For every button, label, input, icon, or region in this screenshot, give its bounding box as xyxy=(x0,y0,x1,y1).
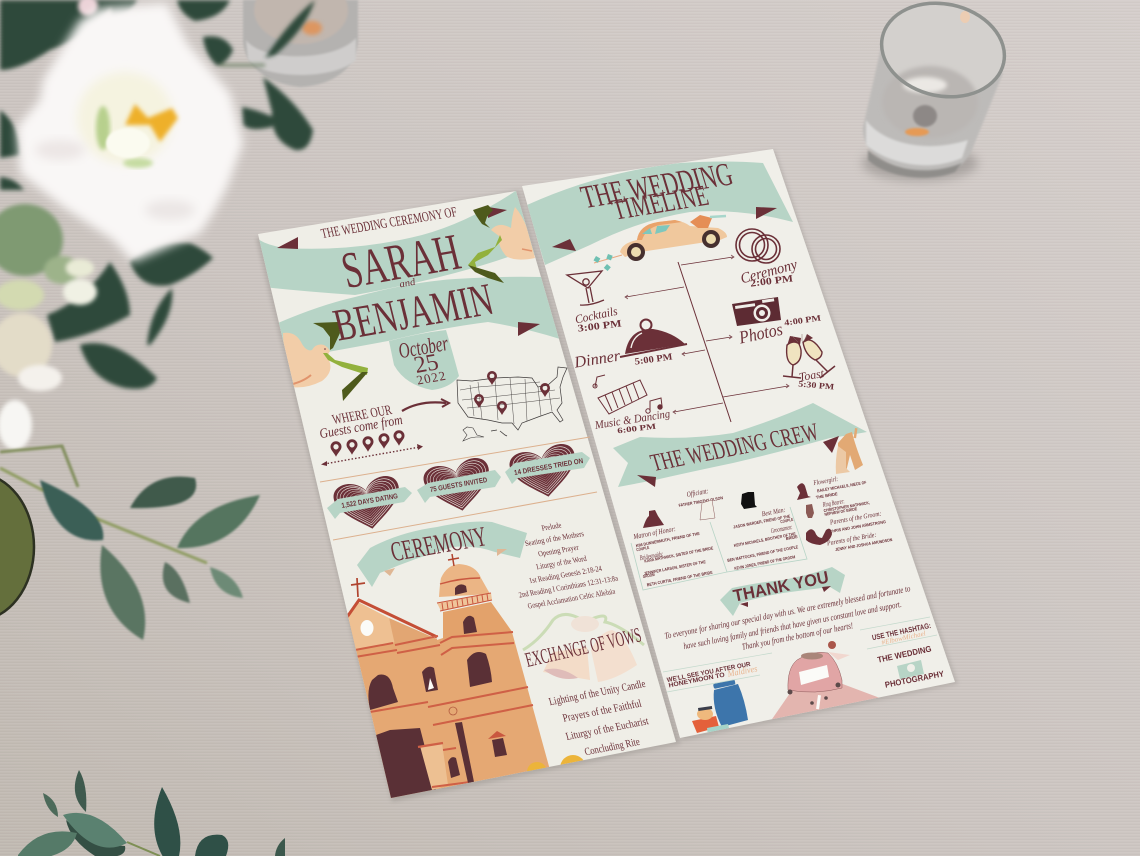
crew: officiant: Officiant: xyxy=(686,486,709,499)
crew: bride's side: KIM DUNNERMUTH, FRIEND OF THE xyxy=(635,531,700,548)
crew: bride's side: Matron of Honor: xyxy=(632,524,676,541)
timeline heading xyxy=(577,157,737,226)
crew borders xyxy=(631,507,807,590)
date shield xyxy=(389,330,459,390)
usa map with pins xyxy=(457,367,567,441)
crew: groom's side: Groomsmen: xyxy=(770,523,793,535)
toast time: 5:30 PM xyxy=(798,378,835,392)
ceremony time: 2:00 PM xyxy=(750,273,794,290)
date: 25 xyxy=(411,350,441,379)
crew heading: THE WEDDING CREW xyxy=(647,419,822,477)
ceremony ribbon and heading xyxy=(357,521,527,587)
crew ribbon xyxy=(613,403,867,487)
crew: family: CHRISTOPHER MATHWICK, xyxy=(823,500,870,513)
panel: left card, ceremony program: and xyxy=(398,277,418,290)
where our guests come from: Guests come from xyxy=(318,413,404,442)
buds and lower blooms xyxy=(0,204,97,450)
photos time xyxy=(736,313,822,348)
crew: groom's side: COUPLE xyxy=(780,517,794,524)
crew: groom's side: KEITH MICHAELS, BROTHER OF THE xyxy=(733,531,796,548)
thank you message: have such loving family and friends that have given us constant love and support. xyxy=(683,599,902,651)
guest pins and dotted arrow xyxy=(321,430,423,466)
thank you heading: THANK YOU xyxy=(731,568,830,606)
heading text: THE WEDDING CEREMONY OF xyxy=(320,205,459,242)
ceremony ribbon and heading: CEREMONY xyxy=(387,521,490,568)
crew: bride's side: COUPLE xyxy=(636,545,650,552)
crew: bride's side: GROOM xyxy=(642,572,655,579)
candle glass, top centre xyxy=(243,0,358,87)
crew: groom's side: BRIDE xyxy=(785,534,798,541)
crew: family: CHRIS AND JOHN ARMSTRONG xyxy=(829,519,886,534)
hashtag block: #ElbowMichael xyxy=(881,629,926,647)
photography block xyxy=(876,643,945,690)
thank you message: Thank you from the bottom of our hearts! xyxy=(741,620,854,652)
thank you message: To everyone for sharing our special day with us. We are extremely blessed and fortunate to xyxy=(664,583,911,641)
arrow to map xyxy=(402,399,449,411)
crew: officiant: FATHER TIMOTHY OLSON xyxy=(678,495,723,508)
eucalyptus branch, left xyxy=(0,446,260,640)
crew: officiant xyxy=(678,486,723,520)
toast time xyxy=(798,366,835,392)
foliage behind flower xyxy=(0,0,315,389)
eucalyptus sprig, bottom xyxy=(18,770,285,856)
photos time: 4:00 PM xyxy=(784,313,822,328)
cocktails time: Cocktails xyxy=(574,304,619,326)
crew: bride's side xyxy=(632,510,714,587)
music and dancing time: Music & Dancing xyxy=(593,408,671,432)
exchange of vows: EXCHANGE OF VOWS xyxy=(523,623,644,672)
program list: Prelude xyxy=(540,520,563,533)
hashtag block: USE THE HASHTAG: xyxy=(871,621,932,642)
stat: dresses tried on: 14 DRESSES TRIED ON xyxy=(513,456,584,477)
timeline ribbon xyxy=(527,162,793,265)
crew: bride's side: Bridesmaids: xyxy=(639,550,664,562)
ribbon fold triangles xyxy=(277,207,540,336)
icon: couple silhouette xyxy=(836,428,863,474)
crew: family: Ring Bearer: xyxy=(822,497,845,509)
toast time: Toast xyxy=(798,366,825,384)
panel: right card, timeline and crew xyxy=(522,149,955,738)
crew: family: Flowergirl: xyxy=(812,475,839,487)
upper name ribbon xyxy=(250,188,540,295)
icon: dove right xyxy=(491,207,535,260)
exchange of vows: Prayers of the Faithful xyxy=(561,698,643,724)
exchange of vows: Liturgy of the Eucharist xyxy=(564,715,650,743)
hashtag block xyxy=(860,617,937,649)
crew: groom's side: Best Man: xyxy=(761,506,786,518)
program list: 1st Reading Genesis 2:18-24 xyxy=(528,564,603,585)
program list: Opening Prayer xyxy=(537,543,580,558)
crew: bride's side: KARA MATHWICK, SISTER OF THE BRIDE xyxy=(644,545,714,564)
exchange of vows: Lighting of the Unity Candle xyxy=(548,678,647,708)
panel: left card, ceremony program: BENJAMIN xyxy=(328,273,498,350)
icon: dinner cloche xyxy=(620,320,687,357)
crew: bride's side: BETH CURTIS, FRIEND OF THE BRIDE xyxy=(646,570,713,587)
icon: pink road and getaway car xyxy=(770,641,880,722)
timeline axis and arrows xyxy=(625,255,789,422)
crew: family: Parents of the Bride: xyxy=(825,531,877,547)
crew: family: Parents of the Groom: xyxy=(829,510,882,527)
photos time: Photos xyxy=(736,319,784,348)
panel: left card, ceremony program: SARAH xyxy=(336,224,466,300)
honeymoon block: Maldives xyxy=(726,663,759,679)
dinner time xyxy=(572,347,673,372)
program list: Gospel Acclamation Celtic Alleluia xyxy=(527,587,616,611)
candle glass, top right xyxy=(862,0,1013,181)
stat: days dating: 1,522 DAYS DATING xyxy=(341,491,399,510)
icon: camera xyxy=(732,297,781,326)
honeymoon block xyxy=(663,653,772,692)
ceremony time: Ceremony xyxy=(739,257,799,287)
date: 2022 xyxy=(415,368,449,388)
photography block: PHOTOGRAPHY xyxy=(884,668,945,690)
exchange of vows: Concluding Rite xyxy=(583,736,641,758)
timeline heading: TIMELINE xyxy=(608,179,712,226)
program list: 2nd Reading I Corinthians 12:31-13:8a xyxy=(518,574,619,600)
crew: family: JENNY AND JOSHUA AMUNDSON xyxy=(835,537,893,552)
icon: green ribbon left xyxy=(313,322,368,401)
church xyxy=(345,554,586,802)
honeymoon block: WE'LL SEE YOU AFTER OUR xyxy=(666,661,751,684)
panel: left card, ceremony program xyxy=(250,188,676,802)
date: October xyxy=(396,330,451,363)
crew: best man icon xyxy=(741,492,757,509)
date xyxy=(396,330,451,388)
icon: green ribbon right xyxy=(468,205,504,283)
crew: groom's side: JASON WARDER, FRIEND OF THE xyxy=(733,514,791,530)
icon: dove left xyxy=(283,333,330,387)
crew: family: BAILEY MICHAELS, NIECE OF xyxy=(817,480,867,493)
program list: Liturgy of the Word xyxy=(535,554,588,571)
icon: luggage xyxy=(692,679,748,736)
dinner time: 5:00 PM xyxy=(634,352,673,368)
panel: card shadows xyxy=(256,150,958,802)
music and dancing time: 6:00 PM xyxy=(617,422,657,435)
program list: Seating of the Mothers xyxy=(524,529,585,548)
cocktails time: 3:00 PM xyxy=(577,318,623,335)
icon: white flower xyxy=(17,0,243,262)
icon: vintage car xyxy=(594,215,727,271)
crew: bride's side: JENNIFER LARSON, SISTER OF THE xyxy=(643,559,706,576)
crew: groom's side: BEN MATTOCKS, FRIEND OF THE COUPLE xyxy=(727,544,799,563)
crew: groom's side xyxy=(727,506,799,571)
program list xyxy=(518,520,619,611)
stat: guests invited: 75 GUESTS INVITED xyxy=(429,475,488,494)
crew: family: THE BRIDE xyxy=(815,491,838,500)
exchange of vows xyxy=(523,623,650,758)
honeymoon block: HONEYMOON TO xyxy=(668,672,725,689)
timeline heading: THE WEDDING xyxy=(577,157,737,216)
stat: days dating xyxy=(327,474,412,534)
stat: dresses tried on xyxy=(505,442,590,502)
icon: martini xyxy=(567,271,604,305)
stat: guests invited xyxy=(417,456,501,516)
icon: wedding rings xyxy=(736,229,780,263)
icon: keyboard and notes xyxy=(593,375,662,414)
lower name ribbon xyxy=(278,277,560,353)
icon: champagne toast xyxy=(783,334,835,378)
dinner time: Dinner xyxy=(572,347,622,372)
green glass dish xyxy=(0,473,34,621)
crew: family: NEPHEW OF BRIDE xyxy=(824,506,858,517)
crew: family xyxy=(797,475,893,552)
crew: groom's side: KEVIN JONES, FRIEND OF THE GROOM xyxy=(734,554,796,571)
thank you ribbon xyxy=(720,567,845,616)
icon: bells with bow xyxy=(523,614,644,682)
cocktails time xyxy=(574,304,623,335)
where our guests come from: WHERE OUR xyxy=(331,403,394,428)
photography block: THE WEDDING xyxy=(876,643,932,665)
